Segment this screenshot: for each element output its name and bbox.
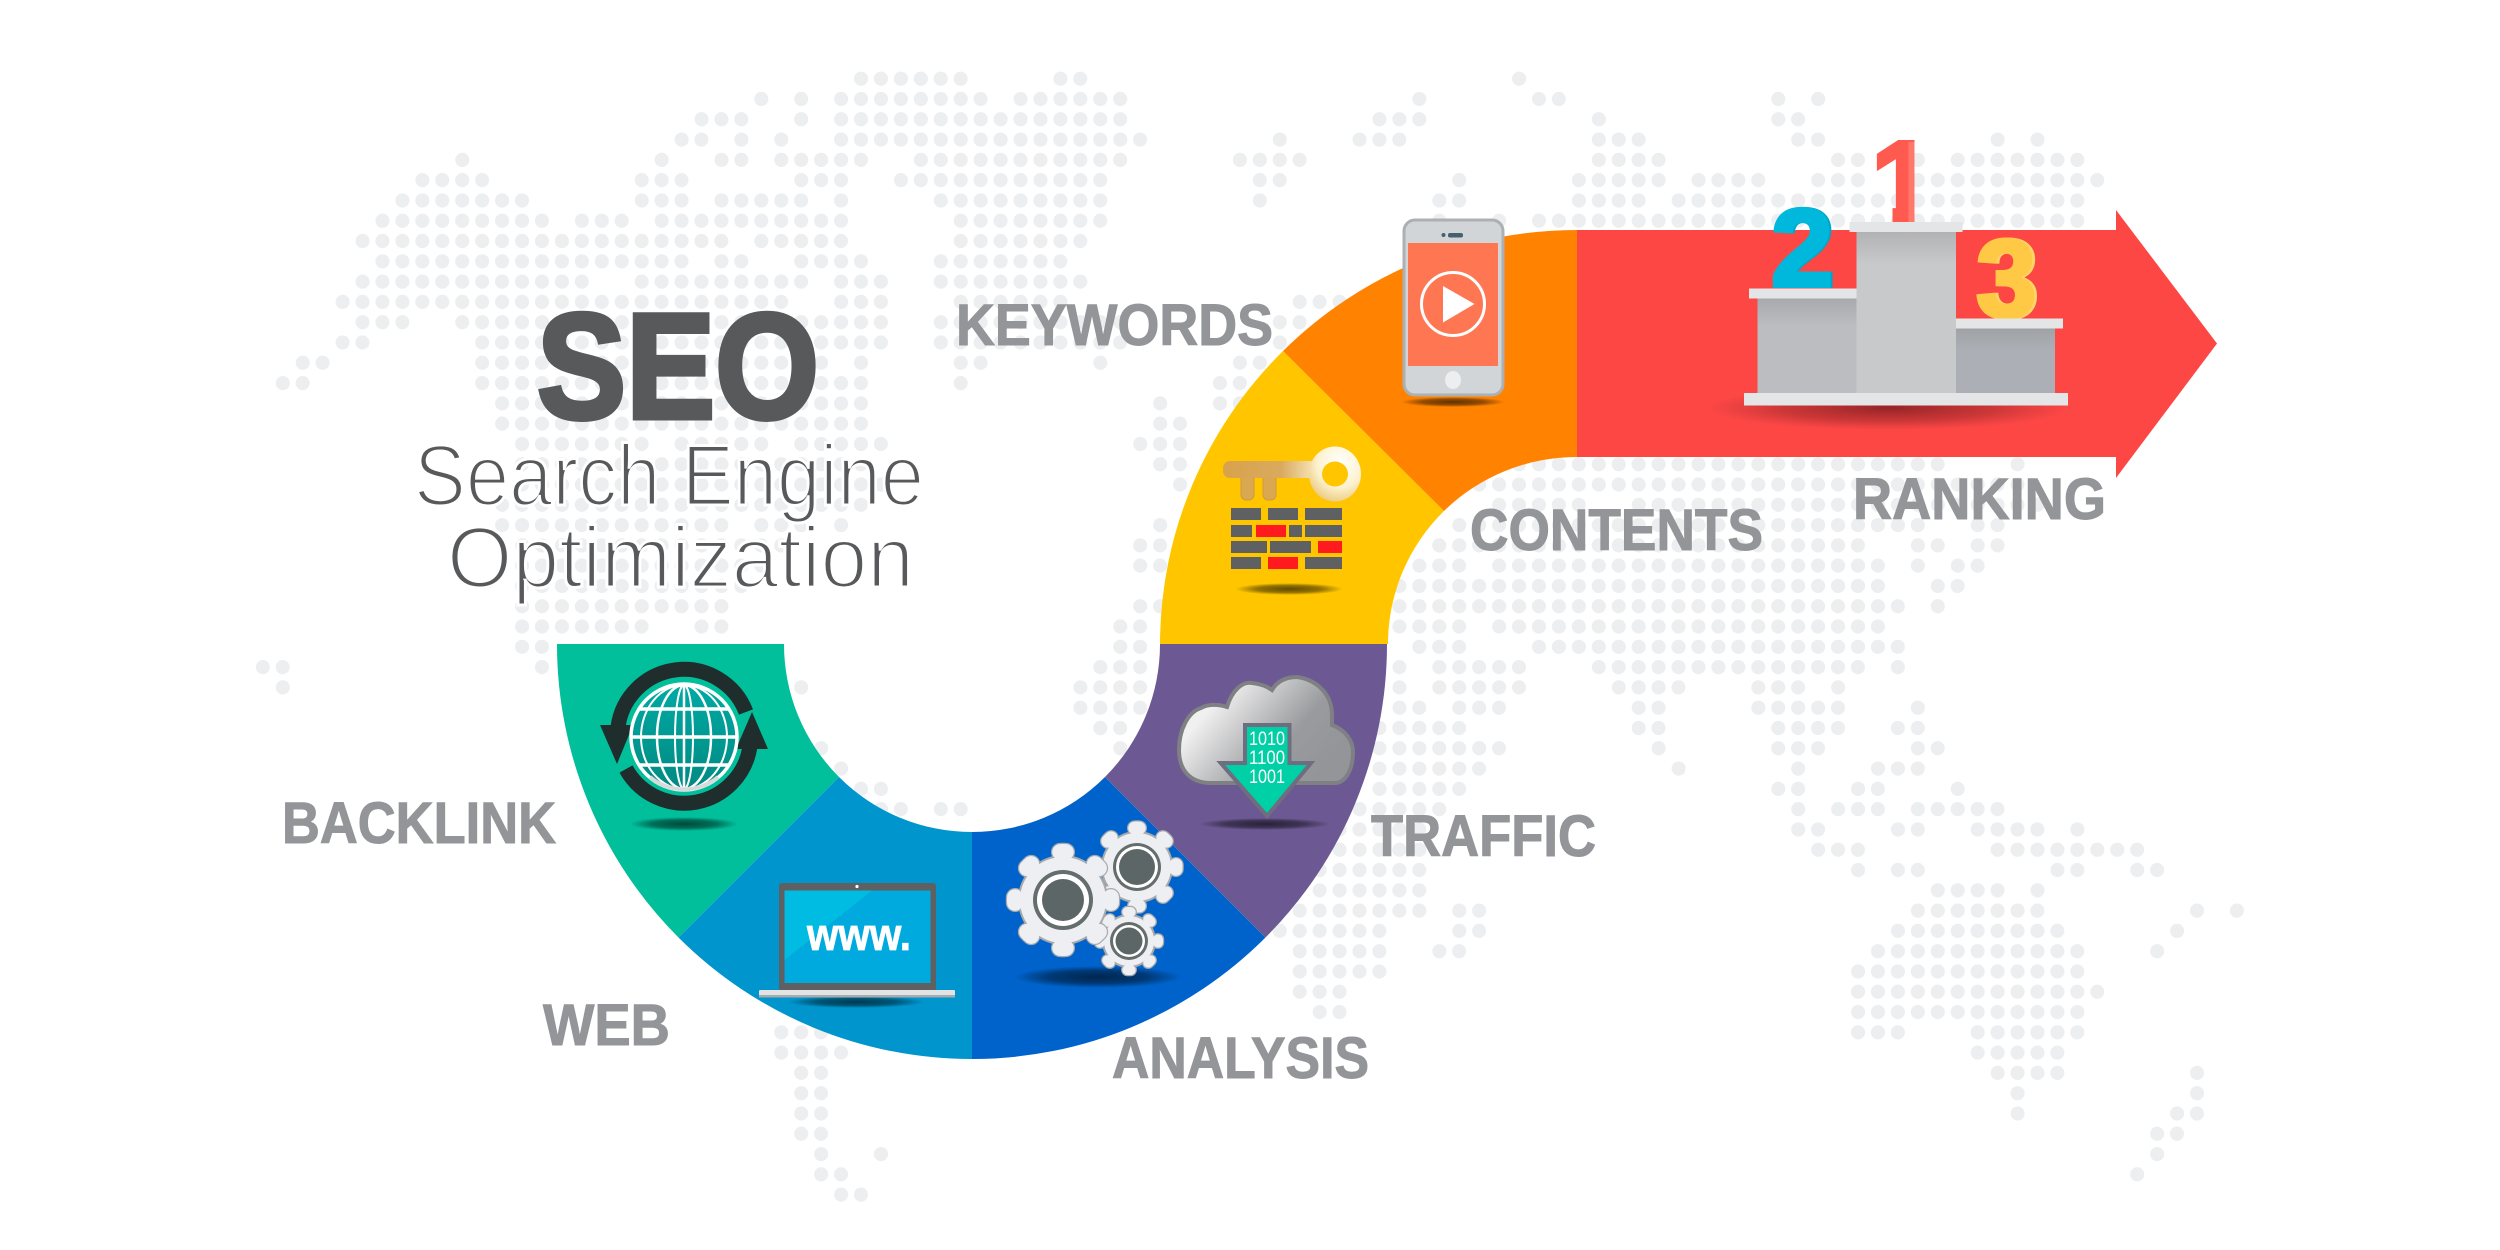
numeral 2: 2 bbox=[1771, 187, 1833, 310]
panel: S-curve band bbox=[557, 210, 2217, 1059]
segment: contents orange bbox=[1283, 230, 1577, 511]
icon: cloud download: 1010 bbox=[1249, 729, 1285, 750]
icon: laptop www bbox=[759, 883, 955, 1008]
icon: cloud download: 1001 bbox=[1249, 767, 1285, 788]
title: SEO: SEO bbox=[537, 282, 819, 450]
subtitle line: Optimization: Optimization bbox=[447, 510, 914, 606]
icon: key and brick wall bbox=[1223, 446, 1361, 595]
SEO infographic canvas bbox=[256, 72, 2244, 1202]
segment: backlink green bbox=[557, 644, 839, 938]
label: WEB: WEB bbox=[543, 993, 670, 1058]
centre column bbox=[1850, 222, 1962, 393]
right column bbox=[1956, 318, 2063, 393]
segment: ranking red arrow bbox=[1577, 210, 2217, 478]
numeral 1 bbox=[1876, 140, 1914, 222]
subtitle line: Search Engine: Search Engine bbox=[414, 428, 924, 524]
gear: bottom bbox=[1100, 912, 1158, 970]
label: BACKLINK: BACKLINK bbox=[282, 791, 556, 856]
label: RANKING: RANKING bbox=[1853, 467, 2106, 532]
icon: smartphone with play button bbox=[1401, 220, 1505, 407]
icon: cloud download: 1100 bbox=[1249, 748, 1285, 769]
segment: web blue bbox=[678, 777, 972, 1059]
podium base bbox=[1744, 393, 2068, 406]
label: TRAFFIC: TRAFFIC bbox=[1371, 804, 1596, 869]
icon: ranking podium bbox=[1722, 140, 2068, 428]
segment: keywords yellow bbox=[1160, 351, 1444, 644]
left column bbox=[1749, 288, 1857, 393]
label: CONTENTS: CONTENTS bbox=[1470, 498, 1763, 563]
label: ANALYSIS: ANALYSIS bbox=[1112, 1026, 1369, 1091]
numeral 2: 2 bbox=[1773, 187, 1835, 310]
segment: traffic purple bbox=[1105, 644, 1387, 938]
label: KEYWORDS: KEYWORDS bbox=[956, 293, 1273, 358]
icon: laptop www: www. bbox=[806, 909, 911, 960]
gear: large bbox=[1015, 852, 1111, 948]
numeral 3: 3 bbox=[1976, 218, 2036, 341]
key bbox=[1223, 446, 1361, 501]
background: dotted world map bbox=[263, 79, 2237, 1195]
brick wall bbox=[1231, 508, 1342, 569]
segment: analysis dark blue bbox=[972, 777, 1266, 1059]
icon: rotating globe bbox=[600, 669, 768, 831]
numeral 3: 3 bbox=[1979, 218, 2039, 341]
gear: top right bbox=[1098, 828, 1176, 906]
numeral 1: 1 bbox=[1871, 117, 1935, 247]
icon: cloud download bbox=[1179, 677, 1353, 830]
icon: gears bbox=[1014, 828, 1182, 988]
